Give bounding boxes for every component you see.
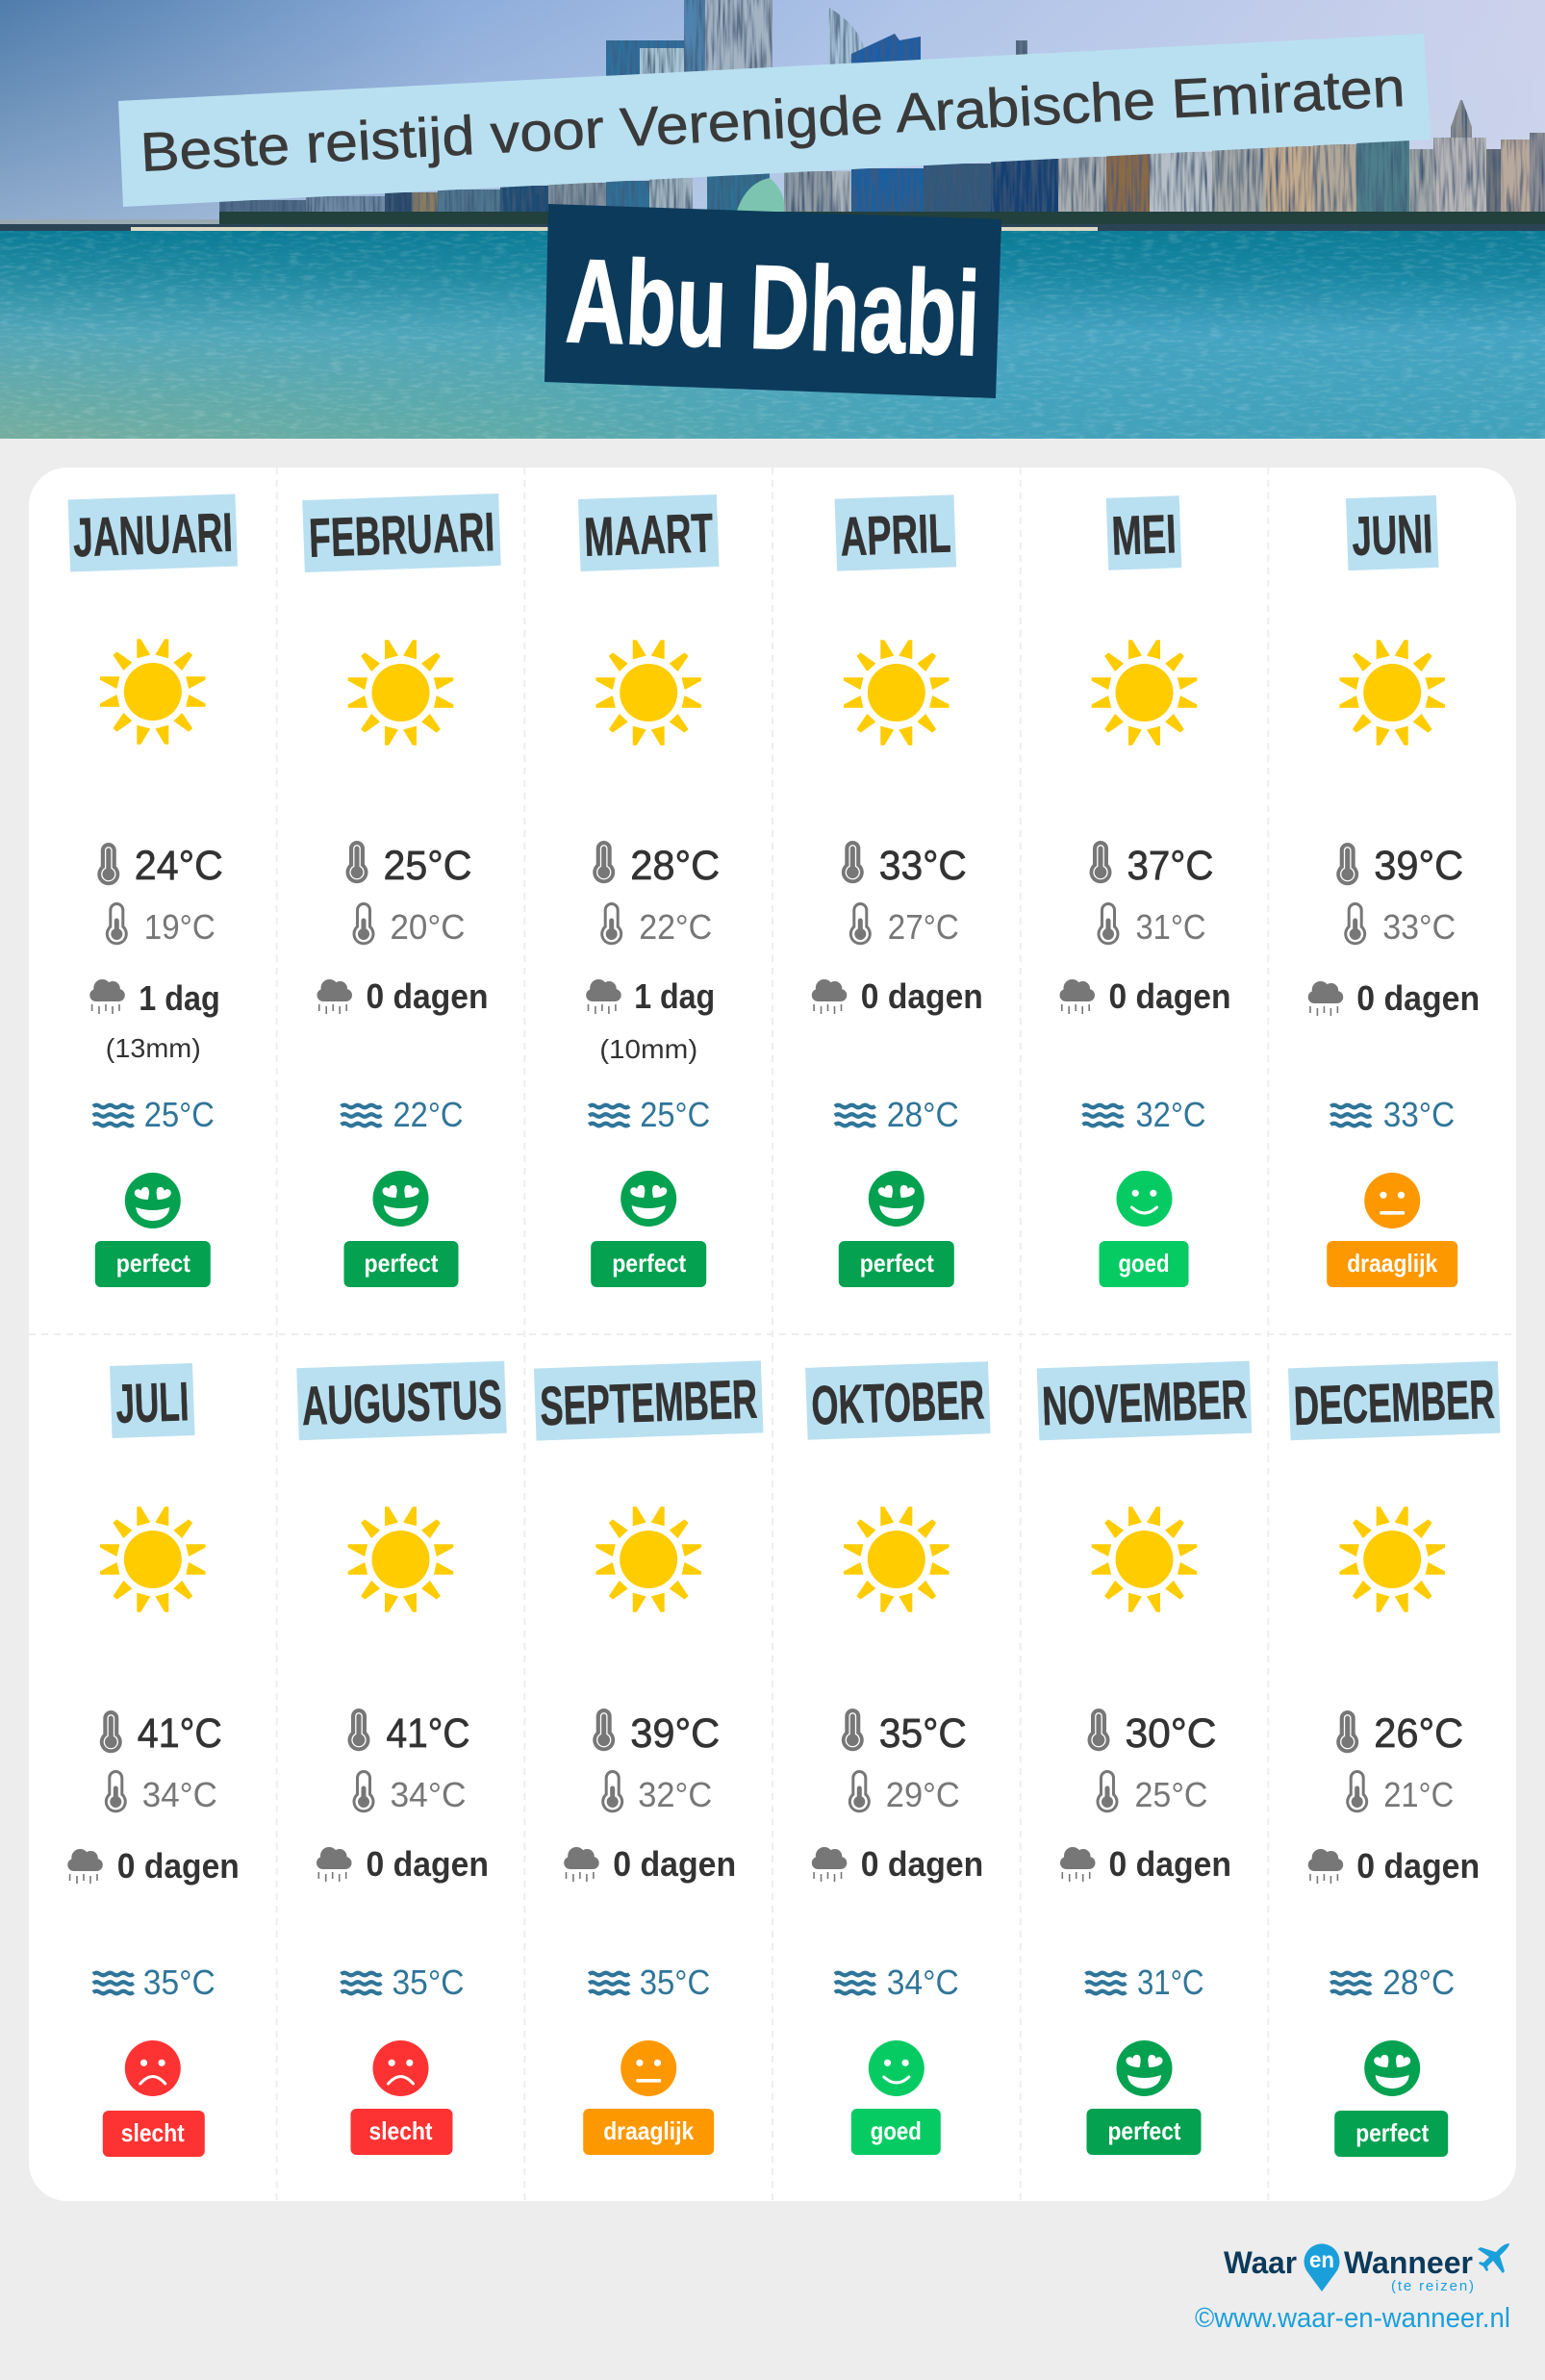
label november [1037,1361,1252,1440]
rain days [586,976,715,1064]
min temperature: 31°C [1135,907,1206,947]
rain days [67,1846,240,1886]
rain days [812,1844,983,1884]
month: april [812,494,983,1287]
sea temperature: 35°C [143,1962,215,2002]
rating: slecht [350,2040,452,2155]
max temperature: 39°C [1374,843,1463,889]
rating: perfect [95,1173,211,1287]
max temperature [1087,1709,1216,1757]
min temperature [1097,902,1206,947]
sea temperature: 25°C [144,1095,215,1134]
rain days [317,976,489,1016]
icon: airplane [1478,2243,1509,2273]
sea temperature [1083,1095,1206,1134]
rating: perfect: perfect [116,1249,190,1278]
max temperature: 24°C [135,843,223,889]
max temperature: 41°C [138,1710,222,1757]
max temperature: 26°C [1374,1710,1463,1757]
sea temperature: 32°C [1135,1095,1206,1134]
month: augustus [296,1361,507,2155]
rating: perfect [1087,2040,1201,2155]
rain days [1308,978,1480,1018]
rain days: 0 dagen [861,976,983,1016]
max temperature [346,841,471,889]
title banner: Beste reistijd voor Verenigde Arabische Emiraten [139,57,1406,184]
rain days [317,1844,489,1884]
label september [534,1360,763,1441]
rain days [1308,1846,1480,1886]
month: maart [578,494,720,1287]
icon: sun [348,641,453,745]
label april [835,494,956,571]
rain days [564,1844,736,1884]
max temperature: 37°C [1127,843,1214,889]
max temperature [593,1709,720,1757]
city title: Abu Dhabi [545,204,1001,398]
icon: sun [596,641,700,745]
sea temperature [1330,1962,1455,2002]
min temperature: 27°C [888,907,959,947]
sea temperature [589,1962,710,2002]
rating: draaglijk: draaglijk [603,2116,695,2145]
label juli [110,1363,195,1438]
sea temperature [93,1095,215,1134]
sea temperature [835,1095,959,1134]
min temperature [106,902,215,947]
month: september [534,1360,763,2155]
rating: perfect: perfect [1108,2116,1181,2145]
max temperature: 28°C [630,843,720,889]
max temperature [842,1709,967,1757]
month: juli [67,1363,240,2157]
label november: NOVEMBER [1041,1369,1248,1437]
max temperature [100,1710,222,1757]
min temperature [105,1770,217,1814]
sea temperature: 28°C [887,1095,959,1134]
sea temperature: 35°C [393,1962,464,2002]
sea temperature [341,1962,464,2002]
label september: SEPTEMBER [539,1369,758,1437]
max temperature [1089,841,1214,889]
min temperature: 34°C [142,1775,217,1814]
logo: Waar en Wanneer (te reizen): Waar [1224,2245,1297,2280]
month: november [1037,1361,1252,2155]
rating: perfect [591,1171,706,1287]
rain days: 0 dagen [1108,1844,1231,1884]
label juli: JULI [114,1371,190,1435]
rain days [812,976,983,1016]
icon: sun [1340,641,1445,745]
max temperature: 41°C [387,1710,469,1757]
min temperature [352,902,466,947]
sea temperature: 28°C [1382,1962,1455,2002]
header photo: Abu Dhabi skyline and sea [0,0,1545,439]
rating: perfect: perfect [1355,2118,1429,2147]
rain days: 0 dagen [1356,978,1480,1018]
rain days: 1 dag [139,978,220,1018]
sea temperature [1085,1962,1204,2002]
logo: Waar en Wanneer (te reizen): (te reizen) [1391,2278,1474,2294]
rating: slecht: slecht [121,2118,185,2147]
label februari [302,494,501,572]
rain days: 0 dagen [1108,976,1231,1016]
logo: Waar en Wanneer (te reizen): Wanneer [1344,2245,1473,2280]
rain days: 0 dagen [366,976,489,1016]
rating: draaglijk [1327,1173,1457,1287]
min temperature [601,1770,712,1814]
rain days [89,978,220,1063]
sea temperature [835,1962,959,2002]
label augustus [296,1361,507,1440]
max temperature [1336,1710,1463,1757]
icon: sun [100,640,205,744]
sea temperature [93,1962,215,2002]
month: december [1288,1361,1500,2157]
sea temperature: 35°C [640,1962,710,2002]
icon: sun [348,1507,453,1611]
min temperature: 29°C [886,1775,960,1814]
icon: sun [1092,641,1197,745]
sea temperature: 31°C [1137,1962,1204,2002]
sea temperature [589,1095,710,1134]
rating: perfect: perfect [612,1249,686,1278]
min temperature [352,1770,466,1814]
max temperature [1336,843,1463,889]
sea temperature [1330,1095,1455,1134]
month: mei [1060,495,1231,1287]
min temperature: 32°C [638,1775,712,1814]
min temperature [848,1770,960,1814]
month: oktober [805,1361,991,2155]
label maart: MAART [583,502,714,569]
sea temperature: 25°C [640,1095,710,1134]
min temperature: 33°C [1382,907,1456,947]
rating: goed [1099,1171,1189,1287]
min temperature [1097,1770,1208,1814]
max temperature [348,1709,469,1757]
min temperature: 34°C [391,1775,466,1814]
max temperature [97,843,223,889]
month: januari [68,494,238,1287]
label juni: JUNI [1351,503,1433,568]
rain days: 1 dag [634,976,715,1016]
max temperature: 33°C [879,843,967,889]
copyright url: ©www.waar-en-wanneer.nl [1195,2303,1510,2334]
min temperature [1344,902,1456,947]
min temperature: 20°C [391,907,466,947]
rating: perfect: perfect [364,1249,439,1278]
rain days: (13mm) [106,1033,201,1063]
rating: goed [851,2040,941,2155]
max temperature: 30°C [1126,1710,1216,1757]
rating: perfect: perfect [860,1249,934,1278]
rating: goed: goed [871,2116,922,2145]
city title: Abu Dhabi: Abu Dhabi [564,235,981,381]
min temperature [849,902,959,947]
min temperature [1346,1770,1454,1814]
rating: perfect [839,1171,954,1287]
rating: perfect [344,1171,458,1287]
panel: monthly climate table [29,468,1516,2201]
min temperature: 21°C [1383,1775,1454,1814]
label mei: MEI [1110,503,1178,568]
month: februari [302,494,501,1287]
max temperature: 39°C [630,1710,720,1757]
rating: draaglijk [583,2040,714,2155]
max temperature [842,841,967,889]
rating: slecht [103,2040,205,2157]
rain days: (10mm) [599,1034,697,1064]
rain days [1060,1844,1231,1884]
min temperature [600,902,712,947]
label juni [1346,495,1438,570]
icon: sun [596,1507,700,1611]
rain days [1060,976,1231,1016]
label januari [68,494,238,572]
min temperature: 22°C [639,907,712,947]
icon: sun [845,641,949,745]
max temperature [593,841,720,889]
rain days: 0 dagen [861,1844,983,1884]
rain days: 0 dagen [1356,1846,1480,1886]
label januari: JANUARI [72,502,234,569]
month: juni [1308,495,1480,1287]
icon: sun [845,1507,949,1611]
icon: sun [100,1507,205,1611]
max temperature: 35°C [879,1710,967,1757]
label februari: FEBRUARI [308,501,495,570]
icon: location pin [1304,2243,1339,2291]
rating: draaglijk: draaglijk [1347,1249,1438,1278]
sea temperature: 33°C [1383,1095,1455,1134]
sea temperature: 34°C [887,1962,959,2002]
rain days: 0 dagen [117,1846,240,1886]
sea temperature: 22°C [393,1095,464,1134]
rating: goed: goed [1118,1249,1170,1278]
logo: Waar en Wanneer (te reizen) [1224,2243,1509,2294]
title banner [118,34,1431,207]
rating: perfect [1334,2040,1448,2157]
sea temperature [341,1095,464,1134]
label augustus: AUGUSTUS [301,1369,503,1437]
icon: sun [1092,1507,1197,1611]
min temperature: 25°C [1135,1775,1208,1814]
max temperature: 25°C [383,843,471,889]
rain days: 0 dagen [366,1844,489,1884]
rating: slecht: slecht [369,2116,433,2145]
label april: APRIL [839,503,951,568]
label maart [578,494,719,571]
icon: sun [1340,1507,1445,1611]
label oktober: OKTOBER [810,1369,985,1437]
min temperature: 19°C [144,907,215,947]
rain days: 0 dagen [613,1844,736,1884]
icon: location pin: en [1309,2247,1334,2272]
label oktober [805,1361,991,1440]
label mei [1106,495,1181,570]
